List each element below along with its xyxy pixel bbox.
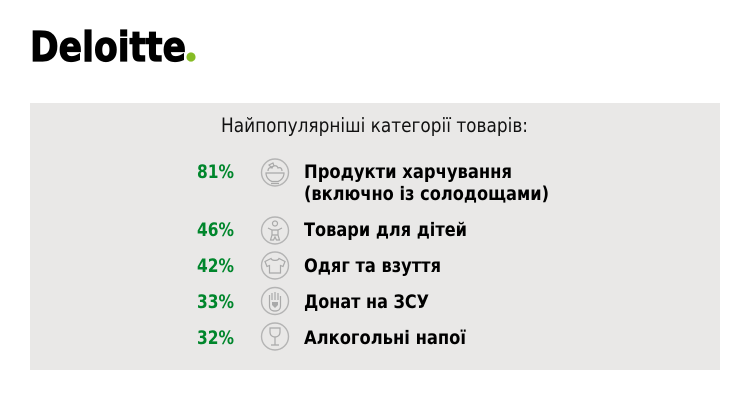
row: donation to armed forces: [197, 288, 429, 314]
row: food: [197, 159, 549, 205]
row: clothes and shoes: Одяг та взуття: [304, 256, 441, 277]
icon: t-shirt: [262, 252, 288, 279]
row: alcoholic drinks: [197, 323, 466, 350]
row: donation to armed forces: 33%: [197, 292, 234, 313]
logo: Deloitte: Deloitte: [30, 23, 186, 71]
heading: Найпопулярніші категорії товарів:: [221, 114, 528, 137]
row: children goods: 46%: [197, 220, 234, 241]
icon: wine glass: [262, 323, 288, 350]
row: food: 81%: [197, 162, 234, 183]
row: food: Продукти харчування: [304, 162, 512, 183]
row: children goods: [197, 217, 467, 244]
icon: baby: [262, 217, 288, 244]
row: food: (включно із солодощами): [304, 184, 549, 205]
panel: top categories: [30, 103, 720, 370]
row: alcoholic drinks: 32%: [197, 328, 234, 349]
row: clothes and shoes: 42%: [197, 256, 234, 277]
icon: salad bowl: [262, 159, 288, 186]
row: donation to armed forces: Донат на ЗСУ: [304, 292, 429, 313]
row: clothes and shoes: [197, 252, 441, 279]
icon: hand with heart: [262, 288, 288, 314]
row: children goods: Товари для дітей: [304, 220, 467, 241]
row: alcoholic drinks: Алкогольні напої: [304, 328, 466, 349]
